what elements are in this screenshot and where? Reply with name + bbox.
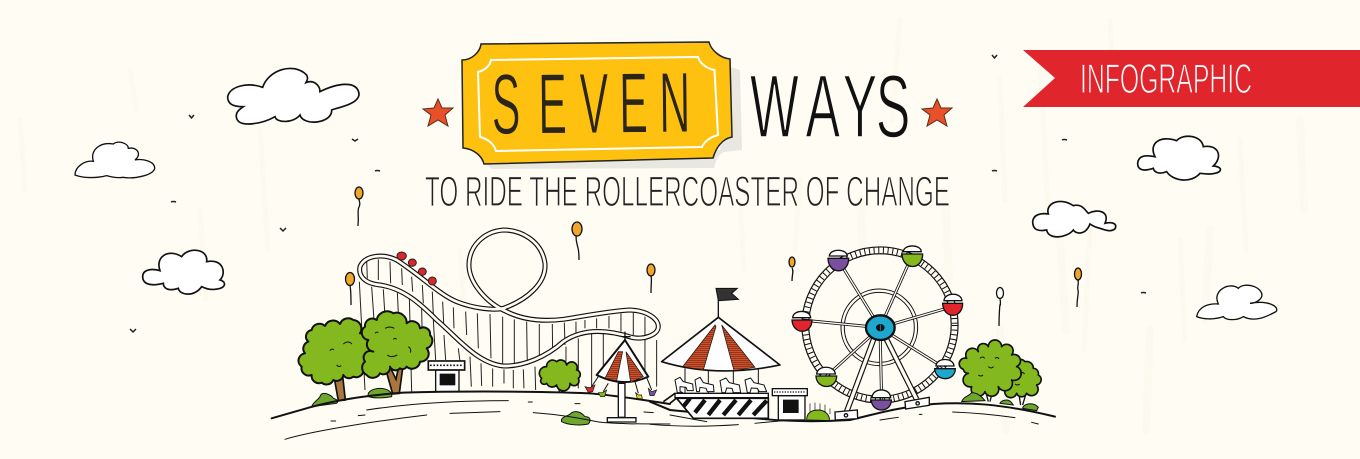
ribbon: infographic [1023, 50, 1360, 107]
carousel canopy stripes [683, 325, 755, 371]
carousel striped base [663, 393, 768, 418]
star: left [423, 99, 453, 126]
balloon 6 [996, 288, 1004, 326]
plant [807, 403, 830, 421]
balloon 2 [346, 272, 354, 305]
carousel poles [685, 367, 758, 393]
swing ride [585, 332, 657, 422]
amusement park scene right [650, 246, 1055, 426]
leg bases [835, 397, 929, 420]
balloon 1 [355, 187, 363, 226]
ticket shadow [480, 67, 742, 169]
gondola: red left [792, 311, 812, 331]
carousel [662, 288, 780, 418]
ribbon shape [1023, 50, 1360, 107]
tree: trunks [334, 367, 403, 401]
carousel horses [675, 377, 767, 393]
wheel rim [805, 250, 955, 400]
ground lines [650, 402, 1055, 426]
gondola: red right [943, 294, 963, 315]
balloon 7 [1074, 268, 1082, 307]
ferris wheel [792, 246, 963, 420]
coaster supports [359, 259, 657, 392]
balloon 4 [647, 264, 655, 293]
balloon 5 [789, 257, 795, 281]
carousel flag [716, 288, 738, 317]
word: WAYS: WAYS [750, 57, 910, 157]
gondola: purple top [828, 250, 849, 271]
trees: right [959, 340, 1041, 405]
carousel platform [675, 393, 768, 398]
balloon 3 [572, 222, 582, 260]
gondola: green bottom [816, 367, 837, 386]
cloud: middle right [1033, 201, 1116, 237]
cloud: small left [75, 142, 155, 178]
swing finial [623, 332, 631, 342]
birds in the sky [130, 55, 1146, 332]
bush: small tree [539, 360, 580, 392]
star: right [922, 99, 952, 126]
gondola: green top [902, 246, 923, 266]
gondola: purple bottom [871, 390, 891, 410]
cloud: large top left [228, 68, 359, 124]
shrubs [312, 388, 590, 425]
cloud: lower right [1197, 285, 1277, 320]
ticket inner border [478, 57, 718, 151]
inner ring [841, 289, 918, 366]
ticket body [462, 42, 732, 164]
amusement park scene left [272, 230, 670, 439]
cloud: lower left [143, 250, 224, 294]
subtitle: TO RIDE THE ROLLERCOASTER OF CHANGE [425, 168, 950, 216]
tree: left crown [298, 318, 377, 385]
ticket booth [428, 361, 465, 392]
swing pole [607, 383, 636, 422]
ground lines [272, 392, 670, 439]
coaster cars [397, 252, 436, 285]
wheel hub [866, 315, 895, 340]
support legs [847, 338, 917, 412]
carousel canopy [662, 317, 780, 371]
word: SEVEN: SEVEN [491, 55, 691, 153]
swing chains and seats [585, 377, 657, 399]
swing canopy [597, 340, 648, 382]
spokes [802, 255, 952, 400]
coaster track [360, 230, 658, 366]
tree: middle crown [362, 311, 432, 378]
small booth [772, 389, 807, 420]
gondola: blue [935, 359, 955, 379]
swing stripes [605, 352, 643, 382]
cloud: upper right [1138, 136, 1220, 180]
balloons [346, 187, 1082, 326]
ticket badge [462, 42, 742, 169]
shrubs: right [962, 393, 1038, 411]
